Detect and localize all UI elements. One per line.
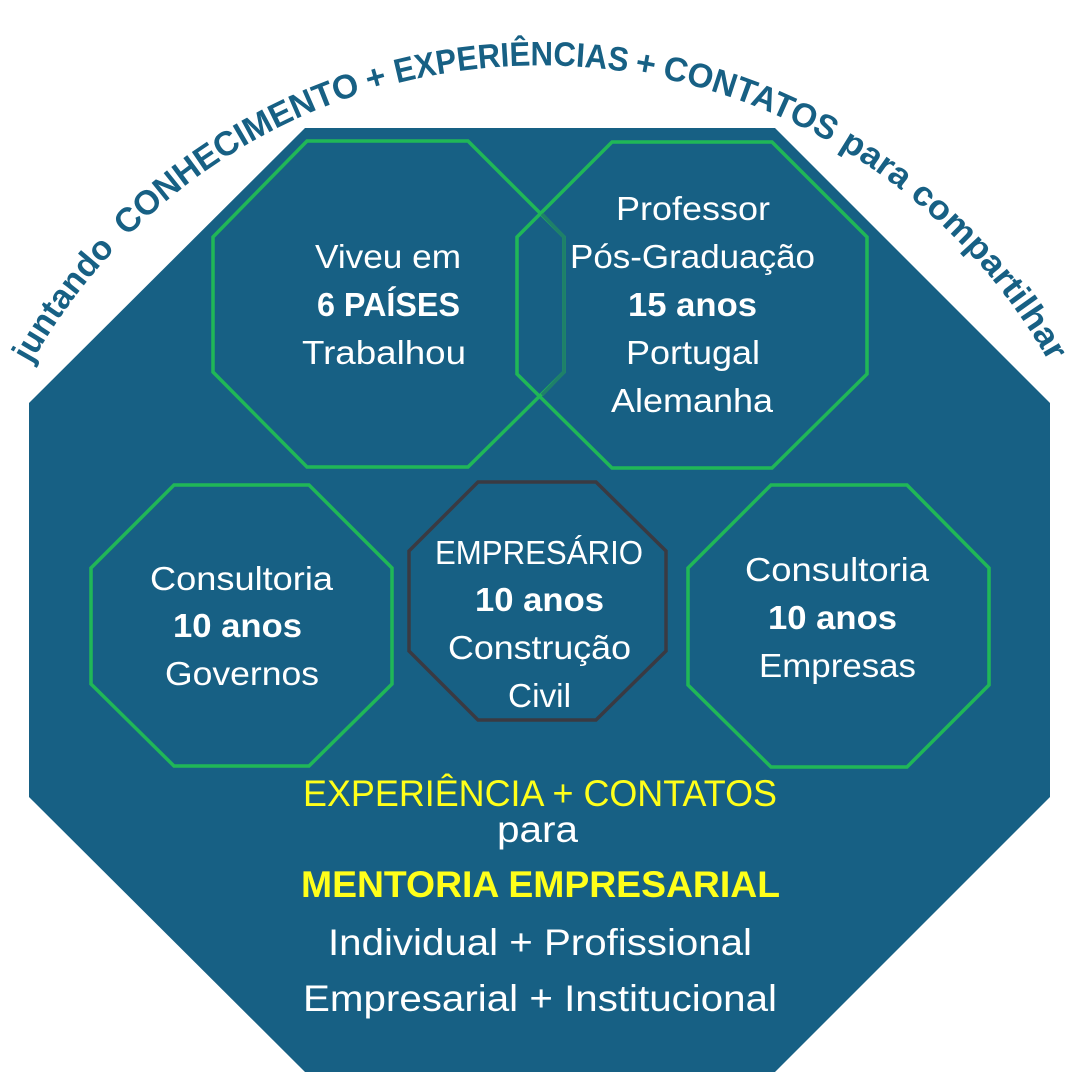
bottom text block — [301, 773, 780, 1019]
octagon: empresario: EMPRESÁRIO — [435, 534, 643, 571]
octagon: consultoria governos: 10 anos — [173, 607, 302, 644]
octagon: viveu em 6 paises: 6 PAÍSES — [317, 286, 460, 323]
bottom text block: Empresarial + Institucional — [303, 978, 777, 1019]
octagon: consultoria empresas — [688, 485, 989, 767]
octagon: empresario: Civil — [508, 677, 571, 714]
bottom text block: para — [497, 809, 578, 850]
octagon: professor pos-graduacao: 15 anos — [628, 286, 757, 323]
octagon: professor pos-graduacao: Portugal — [626, 334, 760, 371]
octagon: professor pos-graduacao — [517, 142, 867, 468]
octagon: empresario: Construção — [448, 629, 631, 666]
octagon: consultoria empresas: Consultoria — [745, 551, 930, 588]
octagon: consultoria empresas: 10 anos — [768, 599, 897, 636]
curved heading: juntando CONHECIMENTO + EXPERIÊNCIAS + CONTATOS para compartilhar — [10, 35, 1064, 368]
octagon: viveu em 6 paises — [213, 141, 564, 467]
octagon: professor pos-graduacao: Alemanha — [611, 382, 774, 419]
octagon: viveu em 6 paises: Viveu em — [315, 238, 461, 275]
octagon: professor pos-graduacao: Professor — [616, 190, 770, 227]
octagon: consultoria governos: Consultoria — [150, 560, 334, 597]
octagon: empresario: 10 anos — [475, 581, 604, 618]
octagon: professor pos-graduacao: Pós-Graduação — [570, 238, 815, 275]
octagon: consultoria governos — [91, 485, 392, 766]
octagon: consultoria empresas: Empresas — [759, 647, 916, 684]
bottom text block: EXPERIÊNCIA + CONTATOS — [303, 773, 777, 814]
bottom text block: MENTORIA EMPRESARIAL — [301, 864, 780, 905]
octagon: viveu em 6 paises: Trabalhou — [302, 334, 466, 371]
bottom text block: Individual + Profissional — [328, 922, 752, 963]
octagon: consultoria governos: Governos — [165, 655, 319, 692]
octagon: empresario — [409, 482, 666, 720]
